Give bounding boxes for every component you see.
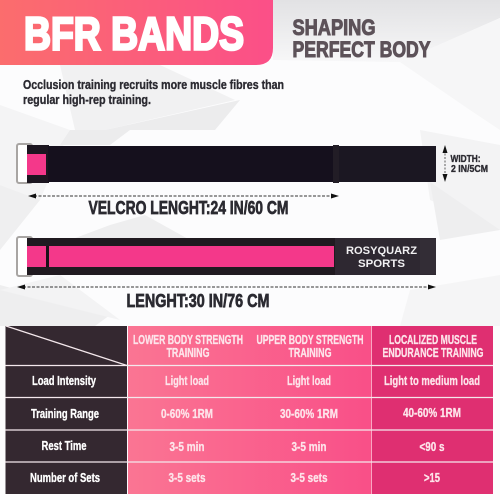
upper body values: 3-5 min — [292, 440, 326, 454]
upper body values: 3-5 sets — [290, 471, 328, 485]
row labels: Load Intensity — [32, 374, 96, 388]
full strap — [17, 237, 436, 276]
buckle — [17, 144, 32, 183]
endurance values — [384, 374, 480, 485]
row labels: Rest Time — [42, 439, 87, 453]
intro text: Occlusion training recruits more muscle fibres than — [23, 77, 284, 92]
width label: 2 IN/5CM — [451, 163, 488, 175]
column headers — [133, 333, 484, 360]
header banner — [0, 0, 273, 65]
subtitle: SHAPING — [292, 15, 376, 40]
endurance values: <90 s — [420, 440, 445, 454]
table — [5, 326, 493, 494]
upper body values: Light load — [287, 374, 331, 388]
velcro length arrow — [28, 194, 339, 198]
lower body values — [161, 374, 213, 485]
lower body values: Light load — [165, 374, 209, 388]
intro text — [23, 77, 284, 107]
width label: WIDTH: — [450, 153, 480, 165]
row labels: Training Range — [31, 407, 99, 421]
velcro strap — [17, 144, 436, 183]
width arrow — [442, 145, 448, 182]
subtitle: PERFECT BODY — [292, 37, 431, 62]
subtitle — [292, 15, 431, 62]
brand label: ROSYQUARZ — [346, 245, 417, 257]
brand label — [346, 245, 417, 270]
upper body values: 30-60% 1RM — [280, 407, 338, 421]
column headers: TRAINING — [288, 346, 332, 360]
endurance values: >15 — [424, 471, 440, 485]
row labels — [30, 374, 100, 485]
row labels: Number of Sets — [30, 471, 100, 485]
lower body values: 3-5 min — [170, 440, 204, 454]
buckle — [17, 237, 32, 276]
grid lines — [5, 326, 493, 462]
column headers: UPPER BODY STRENGTH — [256, 333, 364, 347]
upper body values — [280, 374, 338, 485]
width label — [450, 153, 488, 175]
lower body values: 0-60% 1RM — [161, 407, 213, 421]
column headers: LOWER BODY STRENGTH — [133, 333, 243, 347]
column fills — [6, 326, 493, 494]
full length label: LENGHT:30 IN/76 CM — [126, 291, 270, 311]
intro text: regular high-rep training. — [23, 92, 151, 107]
lower body values: 3-5 sets — [168, 471, 206, 485]
endurance values: 40-60% 1RM — [403, 406, 461, 420]
velcro length label: VELCRO LENGHT:24 IN/60 CM — [88, 198, 288, 218]
title: BFR BANDS — [24, 8, 244, 60]
full length arrow — [17, 284, 436, 290]
column headers: TRAINING — [166, 346, 210, 360]
brand label: SPORTS — [358, 258, 405, 270]
